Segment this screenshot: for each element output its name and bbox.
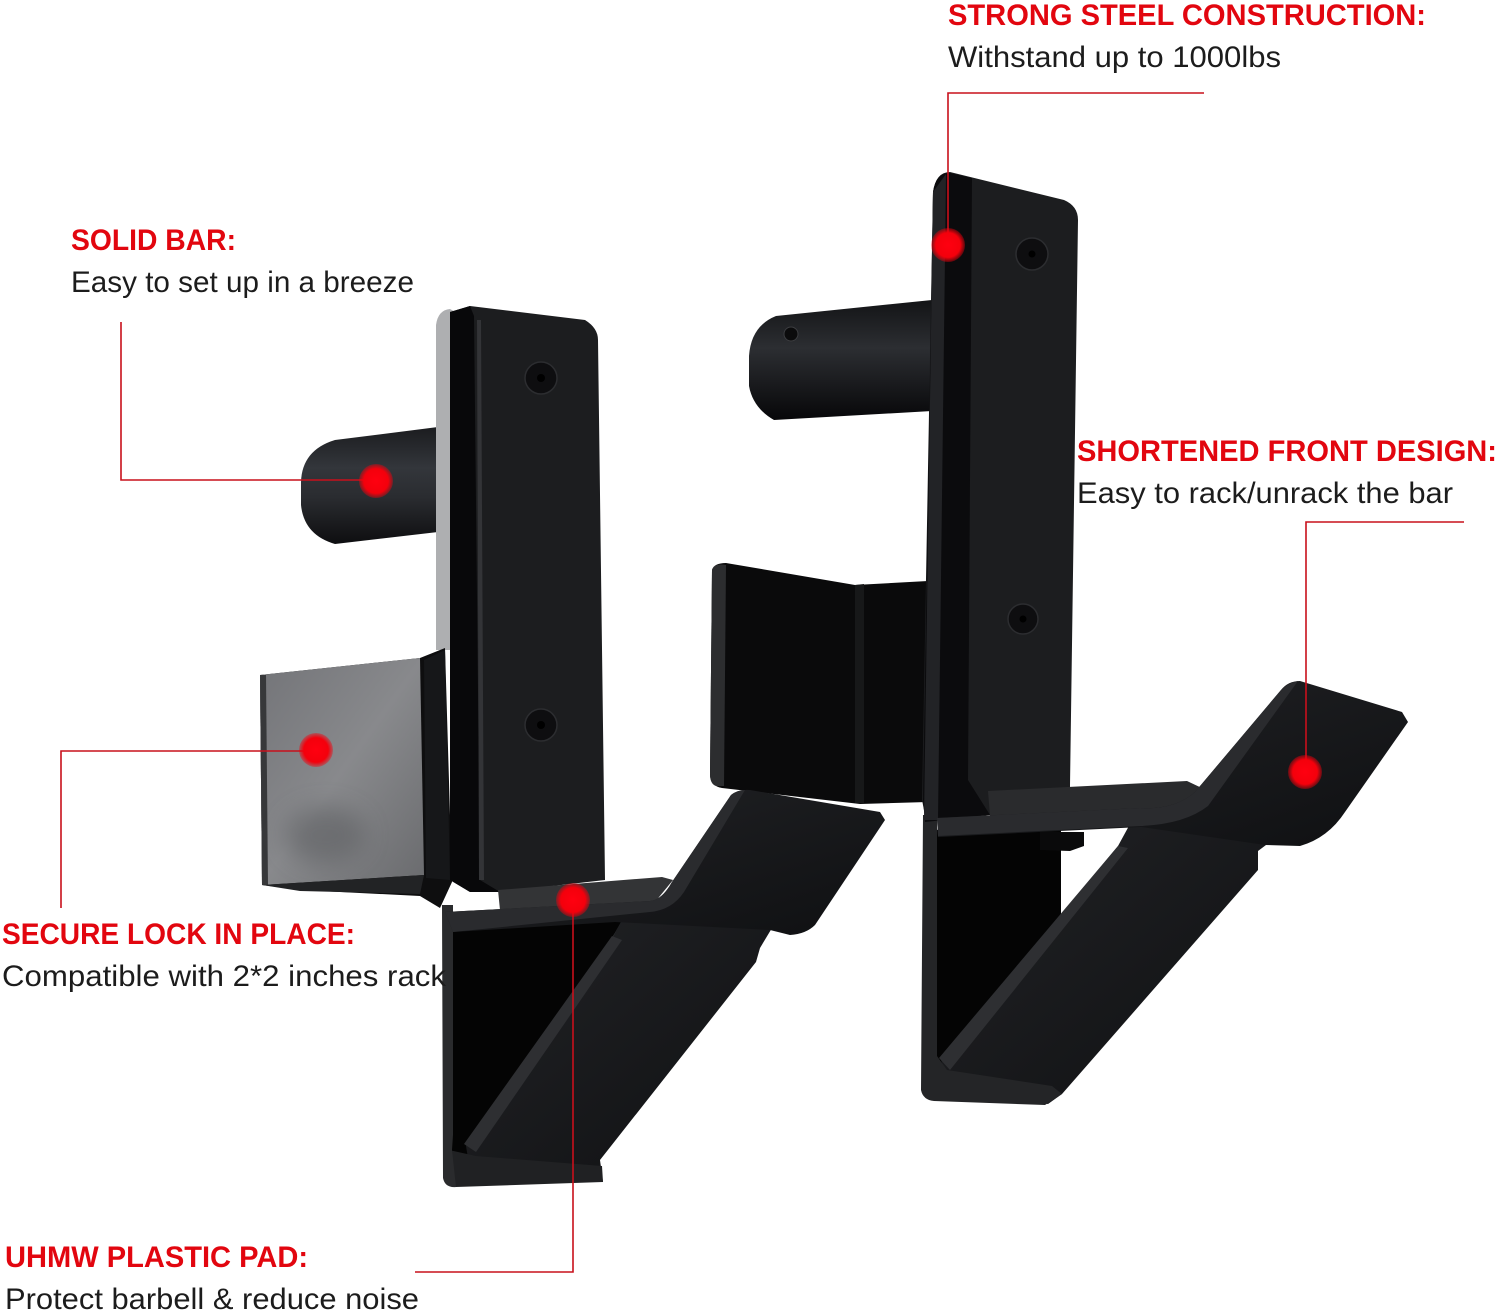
- marker dot: [931, 228, 965, 262]
- right hook interior shadow: [932, 826, 1061, 1072]
- marker dot: [1288, 755, 1322, 789]
- leader line: [121, 322, 376, 480]
- description: Compatible with 2*2 inches rack: [2, 960, 447, 993]
- right hook main plate: [922, 172, 1078, 822]
- marker dot: [556, 883, 590, 917]
- leader line: [61, 751, 316, 908]
- leader line: [415, 900, 573, 1272]
- leader line: [1306, 522, 1464, 772]
- callout: shortened front design: [1077, 435, 1497, 789]
- left hook main plate: [450, 306, 605, 892]
- callout: secure lock in place: [2, 733, 447, 993]
- right hook upper arm: [937, 681, 1408, 846]
- callout: solid bar: [71, 224, 414, 498]
- heading: SHORTENED FRONT DESIGN:: [1077, 435, 1497, 468]
- left hook screws: [525, 362, 557, 741]
- right hook screws: [784, 238, 1048, 634]
- product: right J-hook: [710, 172, 1408, 1105]
- right hook plastic pad: [988, 781, 1206, 816]
- left hook interior shadow: [448, 916, 625, 1158]
- callout: UHMW plastic pad: [5, 883, 590, 1313]
- left hook back edge: [436, 309, 470, 650]
- heading: SOLID BAR:: [71, 224, 236, 257]
- product: left J-hook: [260, 306, 885, 1187]
- left hook lower diagonal arm: [445, 920, 772, 1187]
- marker dot: [359, 464, 393, 498]
- leader line: [948, 93, 1204, 245]
- right hook lower diagonal arm: [939, 824, 1270, 1104]
- right hook front frame: [921, 815, 1062, 1105]
- left hook lock block: [260, 648, 452, 908]
- callout: strong steel construction: [931, 0, 1426, 262]
- right hook lock block: [710, 563, 928, 804]
- heading: SECURE LOCK IN PLACE:: [2, 918, 355, 951]
- marker dot: [299, 733, 333, 767]
- left hook plastic pad: [498, 877, 673, 910]
- description: Easy to set up in a breeze: [71, 266, 414, 299]
- right hook pin: [749, 300, 932, 420]
- left hook front frame: [442, 905, 456, 1187]
- description: Easy to rack/unrack the bar: [1077, 477, 1453, 510]
- right hook underside disc: [1040, 832, 1084, 851]
- description: Withstand up to 1000lbs: [948, 41, 1281, 74]
- heading: UHMW PLASTIC PAD:: [5, 1241, 308, 1274]
- left hook pin: [301, 427, 438, 544]
- left hook upper arm: [445, 790, 885, 935]
